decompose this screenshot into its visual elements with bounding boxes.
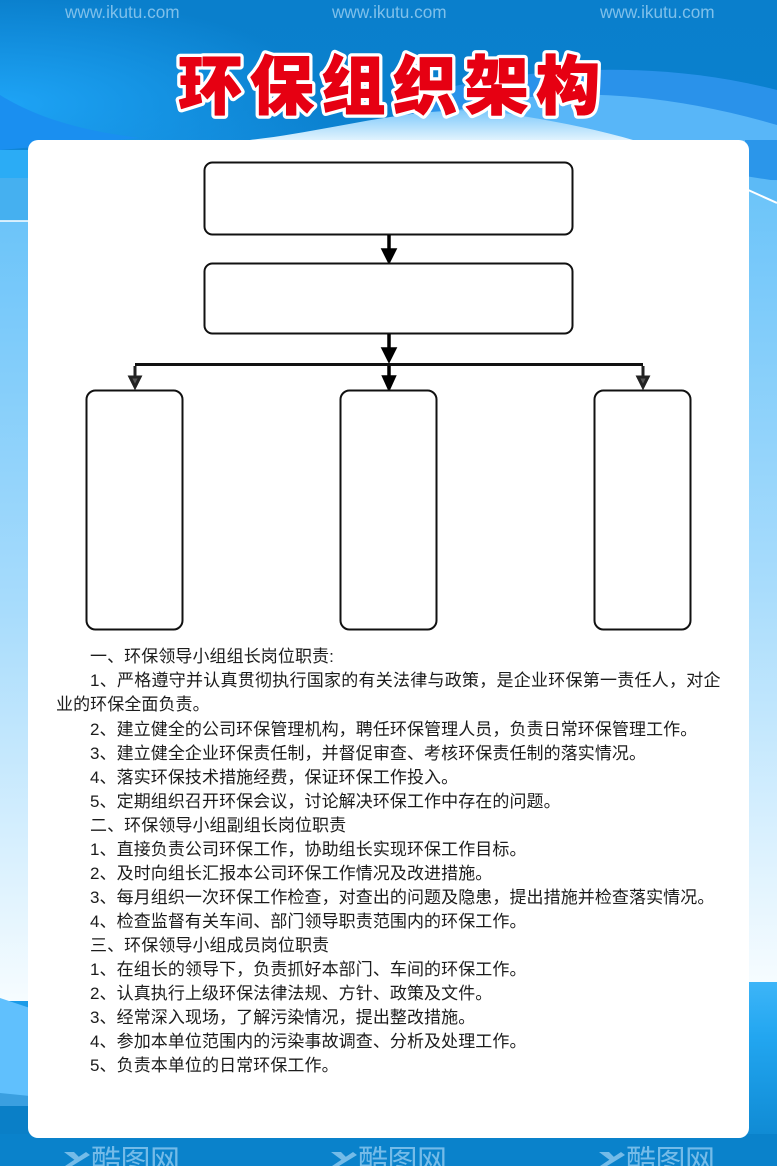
watermark: top website labels: www.ikutu.com [65, 2, 180, 22]
text block: responsibilities: 4、检查监督有关车间、部门领导职责范围内的环保工作。 [90, 912, 527, 931]
watermark: top website labels: www.ikutu.com [600, 2, 715, 22]
box: top level [204, 162, 572, 234]
branch connector [135, 363, 643, 366]
watermark: bottom logos [64, 1146, 714, 1166]
arrow: second level to branch [384, 334, 394, 360]
text block: responsibilities: 1、严格遵守并认真贯彻执行国家的有关法律与政策，是企业环保第一责任人，对企 [90, 671, 721, 690]
text block: responsibilities: 5、负责本单位的日常环保工作。 [90, 1056, 339, 1075]
arrow: left branch [130, 366, 140, 387]
watermark: top website labels: www.ikutu.com [332, 2, 447, 22]
text block: responsibilities: 4、落实环保技术措施经费，保证环保工作投入。 [90, 768, 458, 787]
text block: responsibilities: 2、认真执行上级环保法律法规、方针、政策及文件。 [90, 984, 492, 1003]
title: 环保组织架构 [178, 51, 608, 123]
box: right member [594, 390, 690, 630]
text block: responsibilities: 5、定期组织召开环保会议，讨论解决环保工作中存在的问题。 [90, 792, 561, 811]
text block: responsibilities: 三、环保领导小组成员岗位职责 [90, 936, 329, 955]
text block: responsibilities: 1、在组长的领导下，负责抓好本部门、车间的环保工作。 [90, 960, 527, 979]
text block: responsibilities: 二、环保领导小组副组长岗位职责 [90, 816, 346, 835]
text block: responsibilities: 1、直接负责公司环保工作，协助组长实现环保工作目标。 [90, 840, 527, 859]
text block: responsibilities: 一、环保领导小组组长岗位职责: [90, 647, 334, 666]
text block: responsibilities: 4、参加本单位范围内的污染事故调查、分析及处理工作。 [90, 1032, 527, 1051]
arrow: centre branch [384, 366, 394, 388]
box: second level [204, 264, 572, 334]
watermark: top website labels [65, 2, 715, 22]
arrow: top to second level [384, 235, 394, 261]
box: left member [86, 390, 182, 630]
white content panel [28, 140, 749, 1138]
text block: responsibilities: 3、建立健全企业环保责任制，并督促审查、考核环保责任制的落实情况。 [90, 744, 646, 763]
title: 环保组织架构 [178, 51, 608, 123]
organisation chart [86, 162, 692, 630]
arrow: right branch [638, 366, 648, 387]
text block: responsibilities: 3、每月组织一次环保工作检查，对查出的问题及隐患，提出措施并检查落实情况。 [90, 888, 714, 907]
text block: responsibilities: 2、建立健全的公司环保管理机构，聘任环保管理人员，负责日常环保管理工作。 [90, 720, 697, 739]
box: centre member [340, 390, 436, 630]
text block: responsibilities: 2、及时向组长汇报本公司环保工作情况及改进措施。 [90, 864, 492, 883]
text block: responsibilities [56, 647, 721, 1075]
text block: responsibilities: 业的环保全面负责。 [56, 695, 210, 714]
text block: responsibilities: 3、经常深入现场，了解污染情况，提出整改措施。 [90, 1008, 475, 1027]
